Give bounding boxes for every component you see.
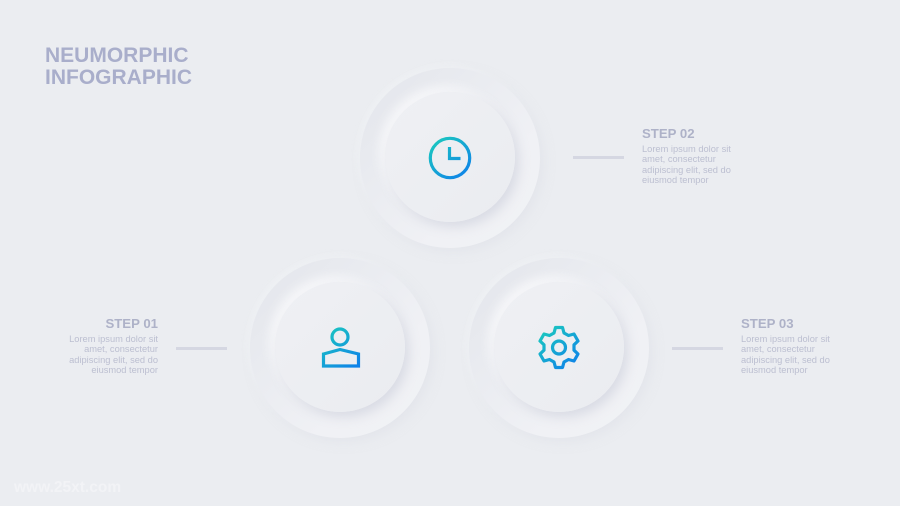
icon: person (322, 327, 360, 368)
connector line: step 03 (672, 347, 723, 350)
text: step 02 description: eiusmod tempor (642, 175, 709, 185)
text: step 01 description: eiusmod tempor (91, 365, 158, 375)
inner disc: step 02 (385, 92, 515, 222)
connector line: step 02 (573, 156, 624, 159)
text: step 02 description: adipiscing elit, sed do (642, 165, 731, 175)
text: step 03 description (741, 334, 830, 375)
text: step 02 description: amet, consectetur (642, 154, 716, 164)
text: step 02 description: Lorem ipsum dolor sit (642, 144, 731, 154)
title: NEUMORPHIC (45, 44, 189, 66)
watermark: www.25xt.com (14, 479, 121, 496)
inner disc: step 03 (494, 282, 624, 412)
heading: step 02: STEP 02 (642, 126, 695, 141)
inner disc: step 01 (275, 282, 405, 412)
text: step 03 description: eiusmod tempor (741, 365, 808, 375)
panel: step 02 circle (360, 68, 540, 248)
panel: step 01 circle (250, 258, 430, 438)
title (45, 44, 192, 88)
icon: gear (538, 326, 580, 370)
heading: step 03: STEP 03 (741, 316, 794, 331)
heading: step 01: STEP 01 (105, 316, 158, 331)
text: step 02 description (642, 144, 731, 185)
text: step 01 description: Lorem ipsum dolor sit (69, 334, 158, 344)
text: step 03 description: adipiscing elit, sed do (741, 355, 830, 365)
text: step 01 description (69, 334, 158, 375)
title: INFOGRAPHIC (45, 66, 192, 88)
connector line: step 01 (176, 347, 227, 350)
text: step 03 description: amet, consectetur (741, 344, 815, 354)
text: step 03 description: Lorem ipsum dolor sit (741, 334, 830, 344)
text: step 01 description: adipiscing elit, sed do (69, 355, 158, 365)
text: step 01 description: amet, consectetur (84, 344, 158, 354)
panel: step 03 circle (469, 258, 649, 438)
icon: clock (428, 136, 472, 180)
